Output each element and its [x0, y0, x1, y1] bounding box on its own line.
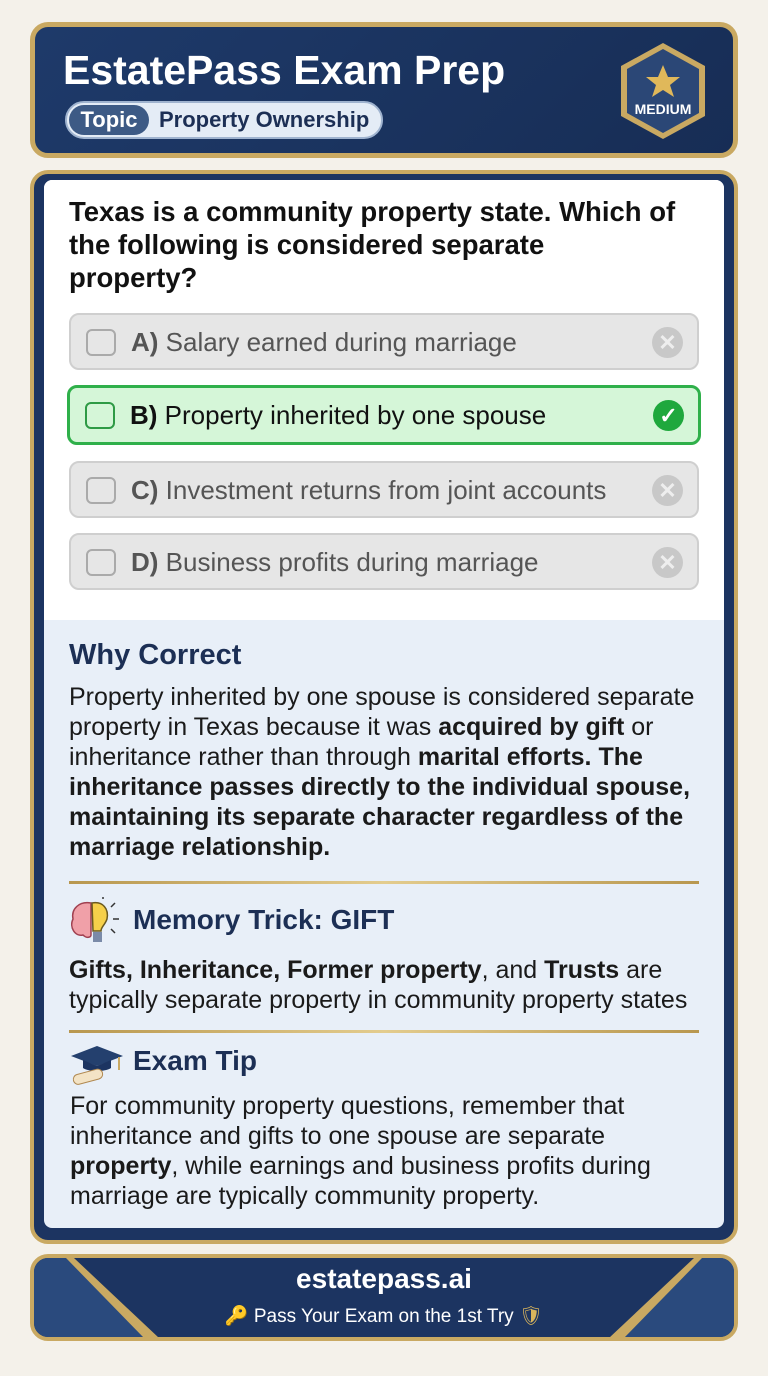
why correct heading: Why Correct [69, 639, 241, 671]
exam tip heading with icon: Exam Tip [133, 1045, 257, 1076]
option A [69, 313, 699, 370]
options [67, 313, 701, 590]
footer tagline: 🔑 Pass Your Exam on the 1st Try 🛡 [225, 1306, 543, 1327]
memory trick heading with icon: Memory Trick: GIFT [133, 904, 394, 935]
topic pill: Topic [80, 107, 138, 132]
icon: brain bulb [71, 897, 119, 942]
option D: D) Business profits during marriage [131, 547, 538, 577]
option C [69, 461, 699, 518]
option A: ✕ [658, 330, 677, 355]
option A: A) Salary earned during marriage [131, 327, 517, 357]
question text [69, 196, 676, 293]
header panel [30, 22, 738, 158]
exam tip body: For community property questions, remember that inheritance and gifts to one spouse are separate property, while earnings and business profits during marriage are typically community property. [70, 1092, 651, 1210]
memory trick body: Gifts, Inheritance, Former property, and Trusts are typically separate property in community property states [69, 956, 687, 1014]
memory trick heading with icon [71, 897, 394, 942]
option B correct: B) Property inherited by one spouse [130, 400, 546, 430]
option C: ✕ [658, 478, 677, 503]
footer site name: estatepass.ai [296, 1263, 472, 1294]
question text: Texas is a community property state. Which of [69, 196, 675, 227]
title: EstatePass Exam Prep [63, 47, 505, 93]
option D [69, 533, 699, 590]
topic pill: Property Ownership [159, 107, 369, 132]
footer [30, 1254, 738, 1341]
option D: ✕ [658, 550, 677, 575]
icon: graduation cap [71, 1046, 123, 1085]
option C: C) Investment returns from joint accounts [131, 475, 606, 505]
option B correct [67, 385, 701, 445]
option B correct: ✓ [659, 403, 678, 428]
why correct body: Property inherited by one spouse is considered separate property in Texas because it was acquired by gift or inheritance rather than through marital efforts. The inheritance passes directly to the individual spouse, maintaining its separate character regardless of the marriage relationship. [69, 683, 694, 861]
exam tip heading with icon [71, 1045, 257, 1085]
badge: medium hexagon [621, 43, 705, 139]
badge: medium hexagon: MEDIUM [635, 101, 691, 117]
question text: the following is considered separate [69, 229, 544, 260]
topic pill [65, 101, 383, 139]
main panel [30, 170, 738, 1244]
question text: property? [69, 262, 197, 293]
